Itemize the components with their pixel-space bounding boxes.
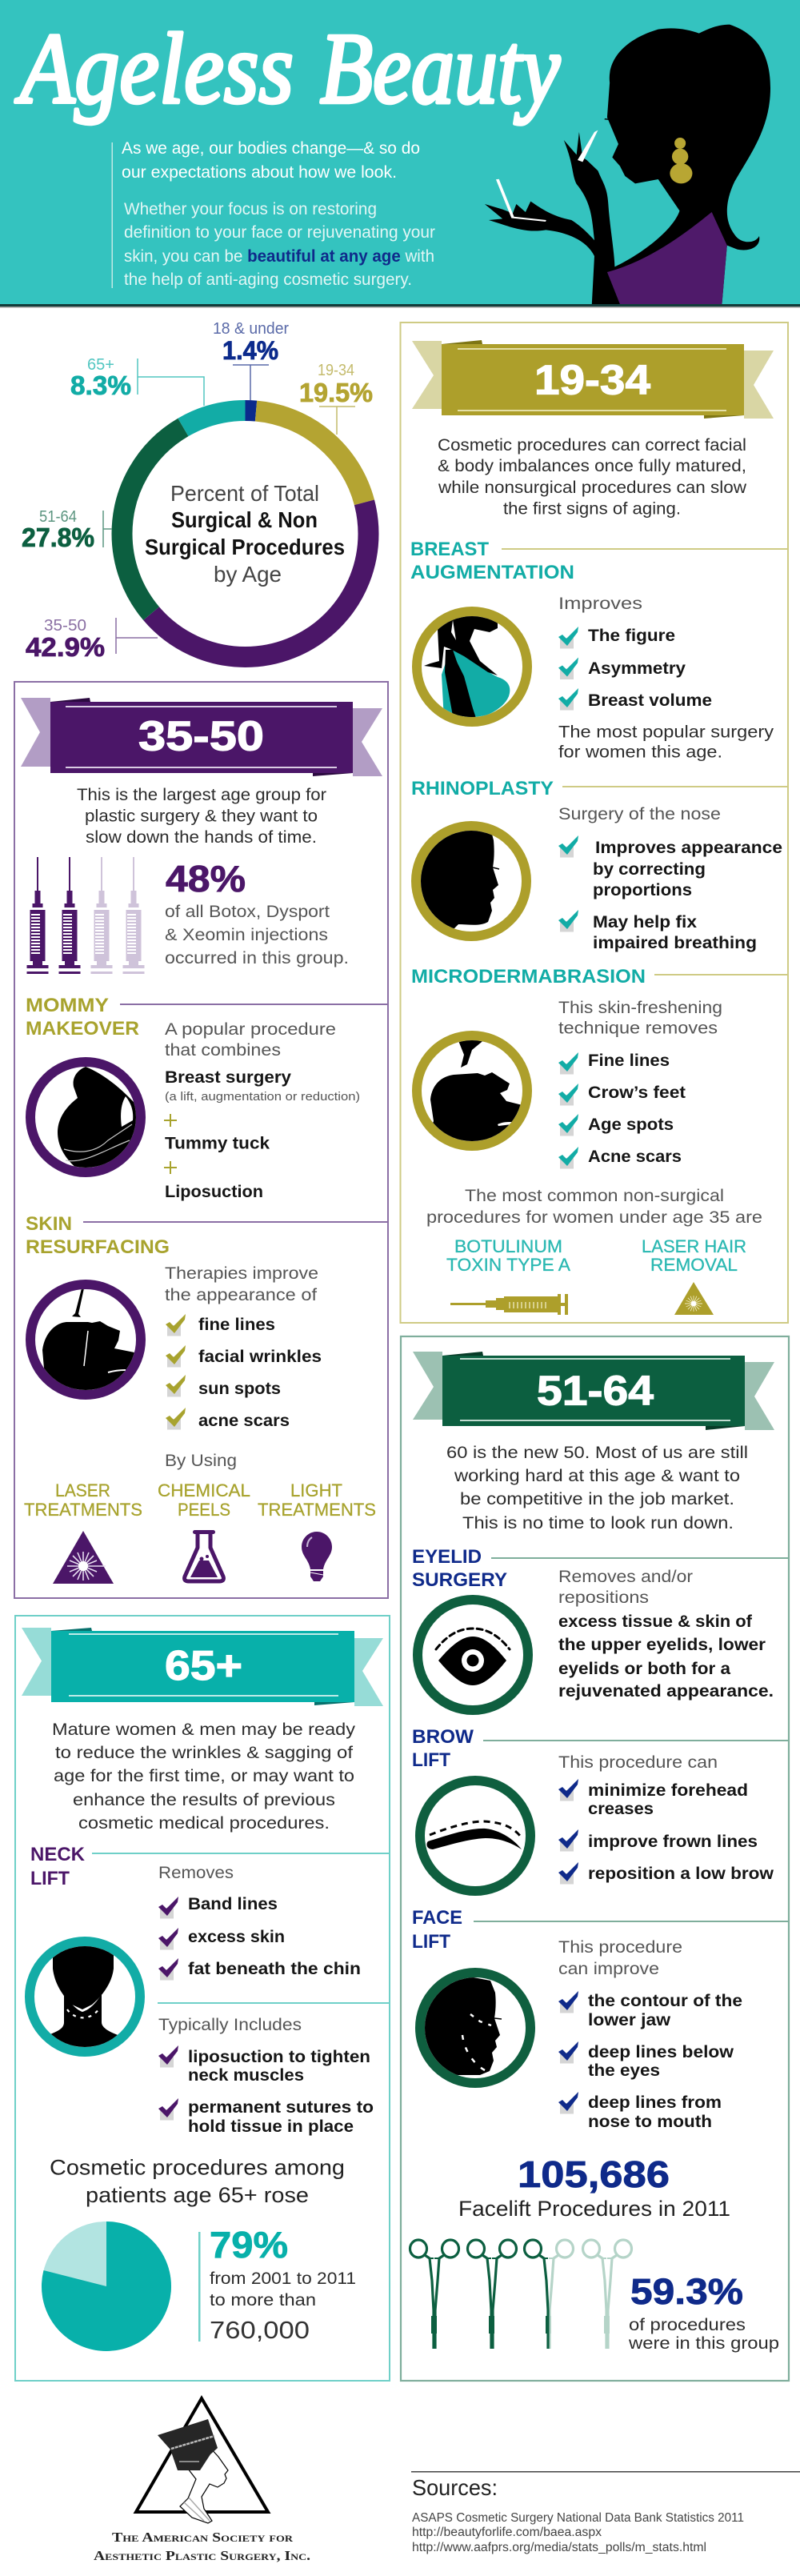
label 65+ [70,356,204,406]
intro text: This is the largest age group for [77,786,326,804]
sources: ASAPS Cosmetic Surgery National Data Bank Statistics 2011 [412,2511,744,2525]
section: eyelid surgery: SURGERY [412,1569,507,1591]
procedure details: permanent sutures to [188,2098,374,2117]
intro text: Cosmetic procedures can correct facial [438,436,746,455]
procedure details: can improve [558,1960,659,1978]
sources: Sources: [412,2475,498,2500]
botulinum label and syringe icon [446,1236,570,1315]
statistic 79%: to more than [210,2291,316,2310]
procedure details [558,1753,774,1884]
logo mark [136,2398,268,2523]
intro text: 60 is the new 50. Most of us are still [446,1444,748,1462]
label 35-50: 35-50 [44,617,86,635]
donut centre label: Percent of Total [170,481,319,506]
laser hair removal label and icon: REMOVAL [650,1255,738,1275]
donut centre label: Surgical Procedures [145,535,345,559]
section: face lift: FACE [412,1907,462,1929]
forceps pictogram [410,2240,632,2349]
intro copy: our expectations about how we look. [122,162,397,182]
logo: American Society for Aesthetic Plastic Surgery [94,2398,310,2563]
section: neck lift: LIFT [30,1868,70,1889]
stat 48%: of all Botox, Dysport [165,903,330,921]
procedure details: Age spots [588,1116,674,1134]
sources [411,2471,800,2554]
procedure details [558,1568,774,1701]
donut centre label: Surgical & Non [171,507,318,532]
intro text [438,436,747,519]
procedure details [164,1020,360,1201]
procedure details [558,595,774,762]
procedure details: Fine lines [588,1052,670,1070]
intro text: Mature women & men may be ready [52,1721,356,1739]
intro text: to reduce the wrinkles & sagging of [55,1744,353,1762]
procedure details: by correcting [593,860,706,879]
section: brow lift [412,1726,789,1891]
sources: http://beautyforlife.com/baea.aspx [412,2526,602,2539]
section: face lift: LIFT [412,1931,450,1953]
organisation name: Aesthetic Plastic Surgery, Inc. [94,2548,310,2563]
procedure details: neck muscles [188,2066,304,2085]
intro text [446,1444,748,1532]
intro text [77,786,326,847]
section: mommy makeover: MAKEOVER [26,1018,139,1040]
stat: 105,686 facelifts [458,2153,730,2221]
procedure details: minimize forehead [588,1781,748,1800]
intro copy: skin, you can be beautiful at any age with [124,246,434,266]
stat 48%: 48% [166,858,246,899]
procedure details: reposition a low brow [588,1865,774,1883]
sources: http://www.aafprs.org/media/stats_polls/m_stats.html [412,2541,706,2554]
intro text: plastic surgery & they want to [85,807,318,826]
section: brow lift: BROW [412,1726,474,1748]
light treatments: LIGHT [290,1480,342,1500]
procedure details: lower jaw [588,2011,671,2029]
intro copy: As we age, our bodies change—& so do [122,138,420,158]
botulinum label and syringe icon: BOTULINUM [454,1236,562,1256]
procedure details [558,999,722,1168]
intro text: cosmetic medical procedures. [78,1814,330,1833]
statistic heading [50,2156,345,2207]
procedure details: Tummy tuck [165,1135,270,1152]
label 19-34: 19-34 [318,362,354,379]
section: eyelid surgery: EYELID [412,1546,482,1568]
section: breast augmentation: BREAST [410,539,489,560]
header banner [0,0,800,307]
section: mommy makeover: MOMMY [26,995,109,1016]
stat: 59.3%: were in this group [628,2334,779,2353]
procedure details: hold tissue in place [188,2117,354,2136]
ribbon 19-34: 19-34 [534,357,650,403]
light treatments [258,1480,376,1581]
procedure details [158,1864,390,2136]
intro copy: the help of anti-aging cosmetic surgery. [124,270,412,289]
pie chart 79% [42,2221,171,2351]
label 65+: 8.3% [70,371,131,400]
stat: 59.3%: 59.3% [630,2271,743,2312]
ribbon 51-64 [413,1352,774,1430]
stat: 105,686 facelifts: 105,686 [518,2153,670,2195]
intro copy: definition to your face or rejuvenating your [124,222,435,242]
procedure details: Acne scars [588,1148,682,1166]
procedure details: Breast surgery [165,1068,291,1087]
intro text: while nonsurgical procedures can slow [438,479,747,497]
statistic heading: Cosmetic procedures among [50,2156,345,2180]
donut ring [122,411,368,657]
procedure details: creases [588,1800,654,1818]
laser hair removal label and icon [642,1236,746,1315]
title: Ageless [15,14,294,125]
procedure details: This procedure can [558,1753,718,1772]
procedure details: for women this age. [558,743,722,762]
intro text: slow down the hands of time. [86,828,317,847]
procedure details: sun spots [198,1380,281,1398]
procedure details [558,805,782,952]
intro text: enhance the results of previous [73,1791,335,1809]
section: microdermabrasion: MICRODERMABRASION [411,966,646,988]
laser treatments: LASER [55,1480,110,1500]
label 35-50: 42.9% [26,632,105,662]
procedure details: Liposuction [165,1183,263,1201]
laser treatments [24,1480,142,1584]
procedure details: Improves [558,595,642,613]
procedure details: fat beneath the chin [188,1960,361,1978]
most common non-surgical procedures [426,1187,762,1315]
botulinum label and syringe icon: TOXIN TYPE A [446,1255,570,1275]
procedure details: Band lines [188,1895,278,1913]
procedure details: proportions [593,881,692,899]
procedure details: Asymmetry [588,659,686,678]
icon: nose profile [416,824,526,936]
donut chart: procedures by age [22,320,373,662]
stat: 105,686 facelifts: Facelift Procedures in 2011 [458,2197,730,2221]
panel: 65+ [15,1616,390,2381]
stat 48%: & Xeomin injections [165,926,328,944]
label 19-34 [299,362,373,435]
procedure details: liposuction to tighten [188,2048,370,2066]
procedure details: acne scars [198,1412,290,1430]
procedure details: the upper eyelids, lower [558,1636,766,1654]
procedure details: Crow’s feet [588,1084,686,1102]
ribbon 35-50: 35-50 [138,714,264,760]
laser treatments: TREATMENTS [24,1500,142,1520]
title [15,14,560,125]
section: microdermabrasion [411,966,788,1168]
woman silhouette [485,25,770,304]
procedure details: facial wrinkles [198,1348,322,1366]
label 18 and under: 18 & under [213,320,289,338]
title: Beauty [320,14,560,125]
procedure details: the appearance of [165,1286,317,1304]
ribbon 19-34 [412,340,774,419]
procedure details: excess skin [188,1928,285,1946]
label 51-64: 27.8% [22,523,94,552]
procedure details: rejuvenated appearance. [558,1682,774,1701]
procedure details: (a lift, augmentation or reduction) [165,1091,360,1104]
procedure details: improve frown lines [588,1833,758,1851]
statistic heading: patients age 65+ rose [86,2183,309,2207]
intro text: be competitive in the job market. [460,1490,734,1508]
label 35-50 [26,617,158,662]
section: face lift [412,1907,789,2131]
section: breast augmentation [410,539,788,762]
icon: breast profile [417,611,527,722]
chemical peels [158,1480,250,1581]
section: neck lift: NECK [30,1844,86,1865]
procedure details: that combines [165,1041,281,1060]
organisation name [94,2530,310,2563]
section: neck lift [30,1844,390,2136]
procedure details: the eyes [588,2061,660,2080]
donut centre label [145,481,345,587]
label 19-34: 19.5% [299,378,373,407]
intro text [52,1721,356,1833]
section: mommy makeover [26,995,388,1201]
icon: reclining head with device [417,1036,528,1146]
procedure details: deep lines below [588,2043,734,2061]
procedure details [558,1938,742,2131]
section: eyelid surgery [412,1546,789,1710]
statistic 79%: from 2001 to 2011 [210,2270,356,2288]
procedure details: Breast volume [588,691,712,710]
icon: neck silhouette [30,1941,140,2057]
intro text: This is no time to look run down. [462,1514,734,1532]
label 18 and under: 1.4% [222,336,278,365]
most common non-surgical procedures: The most common non-surgical [465,1187,724,1205]
procedure details: The figure [588,627,675,645]
procedure details: repositions [558,1588,649,1607]
procedure details: Improves appearance [595,839,782,857]
chemical peels: CHEMICAL [158,1480,250,1500]
intro text: the first signs of aging. [503,499,681,519]
section: brow lift: LIFT [412,1749,450,1771]
intro copy: Whether your focus is on restoring [124,199,377,218]
icon: pregnant belly [30,1062,141,1176]
label 18 and under [213,320,289,400]
icon: eye [418,1600,528,1710]
procedure details [165,1264,322,1470]
panel: 19-34 [400,323,788,1323]
ribbon 51-64: 51-64 [537,1368,654,1415]
procedure details: nose to mouth [588,2113,712,2131]
syringes pictogram [27,857,144,974]
section: skin resurfacing [24,1213,388,1584]
panel: 35-50 [14,682,388,1598]
procedure details: This skin-freshening [558,999,722,1017]
intro text: age for the first time, or may want to [54,1767,354,1785]
section: rhinoplasty: RHINOPLASTY [411,778,554,799]
label 65+: 65+ [87,356,114,374]
statistic 79% [198,2224,356,2344]
label 51-64 [22,508,112,552]
ribbon 65+: 65+ [165,1643,242,1689]
procedure details: Surgery of the nose [558,805,721,823]
statistic 79%: 760,000 [210,2316,310,2344]
procedure details: This procedure [558,1938,682,1957]
ribbon 65+ [22,1628,383,1706]
procedure details: Therapies improve [165,1264,318,1283]
most common non-surgical procedures: procedures for women under age 35 are [426,1208,762,1227]
procedure details: technique removes [558,1020,718,1037]
section: skin resurfacing: RESURFACING [26,1236,170,1258]
procedure details: By Using [165,1452,237,1470]
donut centre label: by Age [214,562,282,587]
chemical peels: PEELS [178,1500,230,1520]
procedure details: The most popular surgery [558,723,774,741]
intro text: working hard at this age & want to [454,1467,740,1485]
organisation name: The American Society for [112,2530,293,2545]
statistic 79%: 79% [210,2224,288,2266]
stat: 59.3% [628,2271,779,2353]
icon: face profile [416,1973,530,2085]
procedure details: Removes and/or [558,1568,693,1586]
section: rhinoplasty [411,778,788,952]
procedure details: impaired breathing [593,934,757,952]
procedure details: May help fix [593,913,697,931]
label 51-64: 51-64 [39,508,77,526]
procedure details: eyelids or both for a [558,1660,730,1678]
laser hair removal label and icon: LASER HAIR [642,1236,746,1256]
procedure details: Removes [158,1864,234,1882]
stat 48% [165,858,349,968]
intro copy [112,138,435,289]
procedure details: excess tissue & skin of [558,1613,753,1631]
procedure details: Typically Includes [158,2016,302,2034]
section: skin resurfacing: SKIN [26,1213,72,1235]
procedure details: A popular procedure [165,1020,336,1039]
procedure details: fine lines [198,1316,275,1334]
procedure details: deep lines from [588,2093,722,2112]
ribbon 35-50 [21,698,382,776]
stat: 59.3%: of procedures [629,2316,746,2334]
panel: 51-64 [401,1336,789,2381]
stat 48%: occurred in this group. [165,949,349,968]
icon: reclining head with laser [30,1284,141,1396]
procedure details: the contour of the [588,1992,742,2010]
intro text: & body imbalances once fully matured, [438,457,746,475]
icon: eyebrow [420,1781,530,1891]
section: breast augmentation: AUGMENTATION [410,562,574,583]
light treatments: TREATMENTS [258,1500,376,1520]
